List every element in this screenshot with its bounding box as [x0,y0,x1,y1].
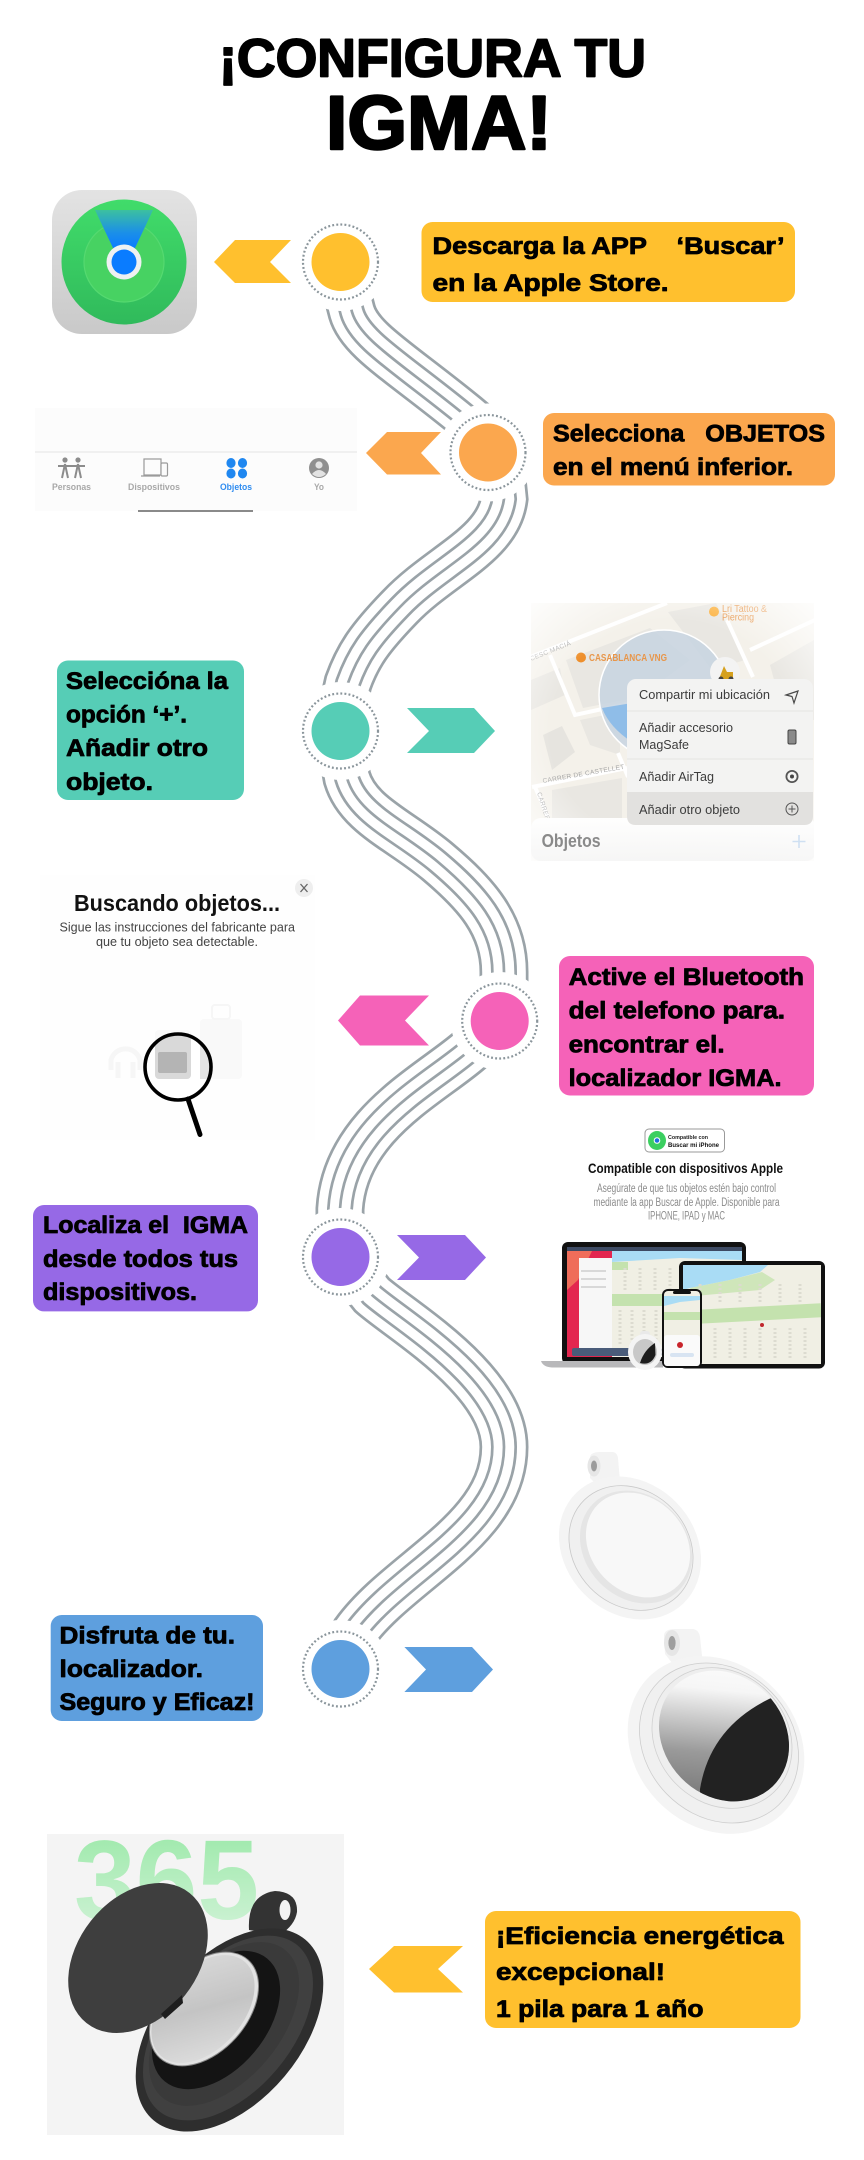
arrow 1 [214,240,291,283]
loop [249,1891,297,1935]
callout 7 [485,1911,800,2028]
screenshot: map with menu: CARRER DE CASTELLET [542,764,625,785]
callout 6: localizador. [60,1656,203,1683]
screenshot: bottom menu: Personas [52,482,91,493]
icon: phone [788,730,796,744]
product photo: battery 365: 365 [74,1817,259,1943]
context menu: Añadir accesorio [639,720,733,735]
arrow 3 [407,708,495,753]
icon: airtag [786,771,798,782]
badge: Buscar mi iPhone [668,1142,719,1149]
title: ¡CONFIGURA TU [219,28,646,88]
callout 6: Seguro y Eficaz! [60,1689,254,1716]
callout 2 [543,413,835,486]
icon: personas [58,457,85,478]
icon: faint bag [155,1030,191,1079]
callout 5: Localiza el IGMA [43,1212,248,1239]
callout 1 [422,222,795,302]
map label: Casablanca: CASABLANCA VNG [589,653,667,664]
callout 6 [51,1615,263,1721]
callout 2: Selecciona OBJETOS [553,420,825,448]
callout 7: ¡Eficiencia energética [496,1923,784,1950]
icon: magnifier [145,1030,214,1134]
icon: location [786,691,798,703]
path segment 1 to 2 [345,285,485,432]
arrow 2 [366,432,441,474]
map label: tattoo [709,604,767,624]
callout 3: objeto. [66,769,153,796]
product: white tag back [530,1447,730,1649]
screenshot: bottom menu: Objetos [220,482,252,493]
context menu: MagSafe [639,737,689,752]
product: white tag front [628,1629,804,1834]
screenshot: searching objects [60,879,313,1137]
path segment 3 to 4 [342,750,504,1000]
callout 2: en el menú inferior. [553,454,793,481]
icon: Find My app [52,190,197,334]
callout 1: Descarga la APP ‘Buscar’ [432,233,784,260]
callout 4: Active el Bluetooth [569,964,804,991]
path segment 4 to 5 [340,1035,485,1235]
context menu [627,679,813,825]
title [219,28,646,166]
compatibility panel: Asegúrate de que tus objetos estén bajo control [597,1183,776,1195]
node 4 [451,972,549,1070]
laptop [541,1242,746,1368]
compatibility panel [541,1129,825,1370]
callout 1: en la Apple Store. [432,270,668,297]
node 2 [439,404,537,502]
winding path lines [340,285,504,1650]
scooter marker [710,657,740,679]
context menu: Añadir AirTag [639,769,714,784]
arrow 4 [338,996,429,1046]
screenshot: searching objects: que tu objeto sea detectable. [96,935,258,949]
callout 3 [57,660,244,800]
map label: tattoo: Piercing [722,612,754,624]
screenshot: map with menu [528,603,816,861]
metal disc [128,1931,280,2087]
phone [662,1289,702,1368]
loop [664,1629,703,1668]
callout 6: Disfruta de tu. [60,1622,235,1649]
callout 3: Añadir otro [66,735,208,762]
screenshot: searching objects: Sigue las instrucciones del fabricante para [60,920,295,934]
icon: dispositivos [141,459,168,476]
footer: Objetos [531,818,816,861]
badge [645,1129,724,1152]
close button [295,879,313,897]
base [98,1893,361,2160]
tablet [679,1261,825,1368]
node 5 [292,1208,390,1306]
callout 4: del telefono para. [569,998,785,1025]
lid [39,1856,237,2060]
icon: yo [309,458,329,478]
callout 5 [33,1205,258,1311]
node 6 [292,1620,390,1718]
callout 4: encontrar el. [569,1031,725,1058]
product photo: battery 365 [39,1817,361,2160]
path segment 2 to 3 [342,440,504,710]
callout 5: desde todos tus [43,1246,238,1273]
node 1 [292,213,390,311]
compatibility panel: mediante la app Buscar de Apple. Disponible para [594,1197,780,1209]
callout 3: opción ‘+’. [66,702,187,728]
blue radius circle [598,629,718,749]
callout 4 [559,956,814,1096]
callout 7: 1 pila para 1 año [496,1996,704,2023]
footer: Objetos: Objetos [542,831,601,851]
callout 7: excepcional! [496,1959,665,1986]
compatibility panel: Compatible con dispositivos Apple [588,1160,783,1176]
callout 3: Seleccióna la [66,668,228,695]
icon: faint headphones [111,1049,140,1078]
context menu: Añadir otro objeto [639,802,740,817]
path segment 5 to 6 [345,1280,504,1650]
callout 5: dispositivos. [43,1279,197,1306]
icon: faint luggage [200,1005,242,1079]
title: IGMA! [326,81,552,166]
roads [530,603,815,817]
screenshot: bottom menu: Yo [314,482,324,493]
callout 4: localizador IGMA. [569,1065,782,1092]
map label: tattoo: Lri Tattoo & [722,604,767,615]
building blocks [566,628,652,708]
screenshot: bottom menu: Dispositivos [128,482,180,493]
screenshot: searching objects: Buscando objetos... [74,890,280,916]
icon: plus [786,803,798,815]
arrow 7 [369,1946,463,1992]
screenshot: map with menu: CARRER [535,791,551,821]
arrow 6 [404,1647,493,1692]
screenshot: bottom menu [35,408,357,512]
map label: Casablanca [576,652,666,662]
mini tag [628,1331,662,1370]
loop [588,1452,620,1484]
node 3 [292,682,390,780]
screenshot: map with menu: CESC MACIÁ [528,638,572,663]
context menu: Compartir mi ubicación [639,687,770,702]
badge: Compatible con [668,1135,709,1141]
compatibility panel: IPHONE, IPAD y MAC [648,1210,725,1222]
icon: objetos [226,458,247,478]
arrow 5 [397,1235,486,1280]
